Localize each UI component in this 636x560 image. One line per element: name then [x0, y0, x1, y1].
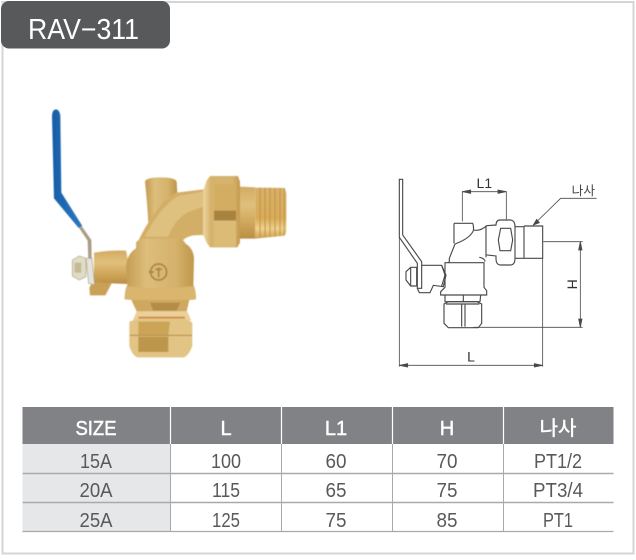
row 20A: 65 — [326, 480, 346, 502]
row 15A: 15A — [80, 451, 113, 473]
lower collar — [131, 300, 189, 311]
row 15A: 60 — [326, 451, 346, 473]
dimension label: thread leader: 나사 — [572, 184, 595, 198]
silver nut and washer — [72, 256, 95, 285]
specification table — [22, 407, 614, 532]
size column shading — [22, 444, 170, 532]
row 25A: 25A — [80, 510, 113, 532]
row 20A: PT3/4 — [533, 480, 583, 502]
top boss — [145, 177, 177, 230]
elbow — [138, 189, 203, 241]
row 20A: 115 — [212, 480, 240, 502]
dimension L1 — [462, 175, 506, 221]
table header row: H — [440, 418, 454, 440]
dimension L — [399, 237, 543, 367]
row 20A: 20A — [80, 480, 113, 502]
row 20A — [80, 480, 583, 502]
table header row: SIZE — [76, 418, 116, 440]
male thread — [255, 188, 286, 239]
dimension H — [473, 242, 583, 327]
title badge: RAV−311 — [28, 14, 139, 46]
dimension H: H — [564, 279, 580, 289]
dimension L: L — [467, 348, 475, 364]
valve body — [125, 239, 196, 301]
technical drawing with dimensions — [399, 175, 597, 367]
drawing: union and nipple — [486, 220, 543, 265]
compression nut — [129, 319, 192, 357]
nipple — [240, 187, 255, 239]
table rows — [80, 451, 583, 532]
product photo: brass ball valve with blue handle — [52, 109, 286, 357]
icon: blue lever handle — [52, 109, 82, 228]
table header row: L1 — [325, 418, 347, 440]
brass stem — [94, 251, 128, 284]
row 25A: 85 — [436, 510, 458, 532]
row 15A: 70 — [436, 451, 458, 473]
drawing: lower nut — [444, 302, 482, 328]
row 15A: 100 — [211, 451, 241, 473]
drawing: stem and nut — [406, 265, 446, 293]
union nut — [203, 176, 240, 247]
logo mark — [149, 264, 167, 280]
drawing: top boss and elbow — [448, 223, 496, 263]
drawing: body — [441, 263, 487, 295]
row 15A — [80, 451, 582, 473]
row 25A: PT1 — [543, 510, 573, 532]
table header row: 나사 — [540, 417, 576, 440]
row 15A: PT1/2 — [534, 451, 582, 473]
table header row: L — [220, 418, 232, 440]
table header row — [22, 407, 614, 444]
row 25A: 75 — [326, 510, 346, 532]
row 25A: 125 — [212, 510, 240, 532]
row 25A — [80, 510, 573, 532]
table grid — [22, 407, 614, 532]
drawing: lever — [399, 179, 422, 288]
title badge — [1, 1, 170, 48]
row 20A: 75 — [436, 480, 458, 502]
dimension label: thread leader — [533, 184, 597, 225]
dimension L1: L1 — [477, 175, 492, 191]
